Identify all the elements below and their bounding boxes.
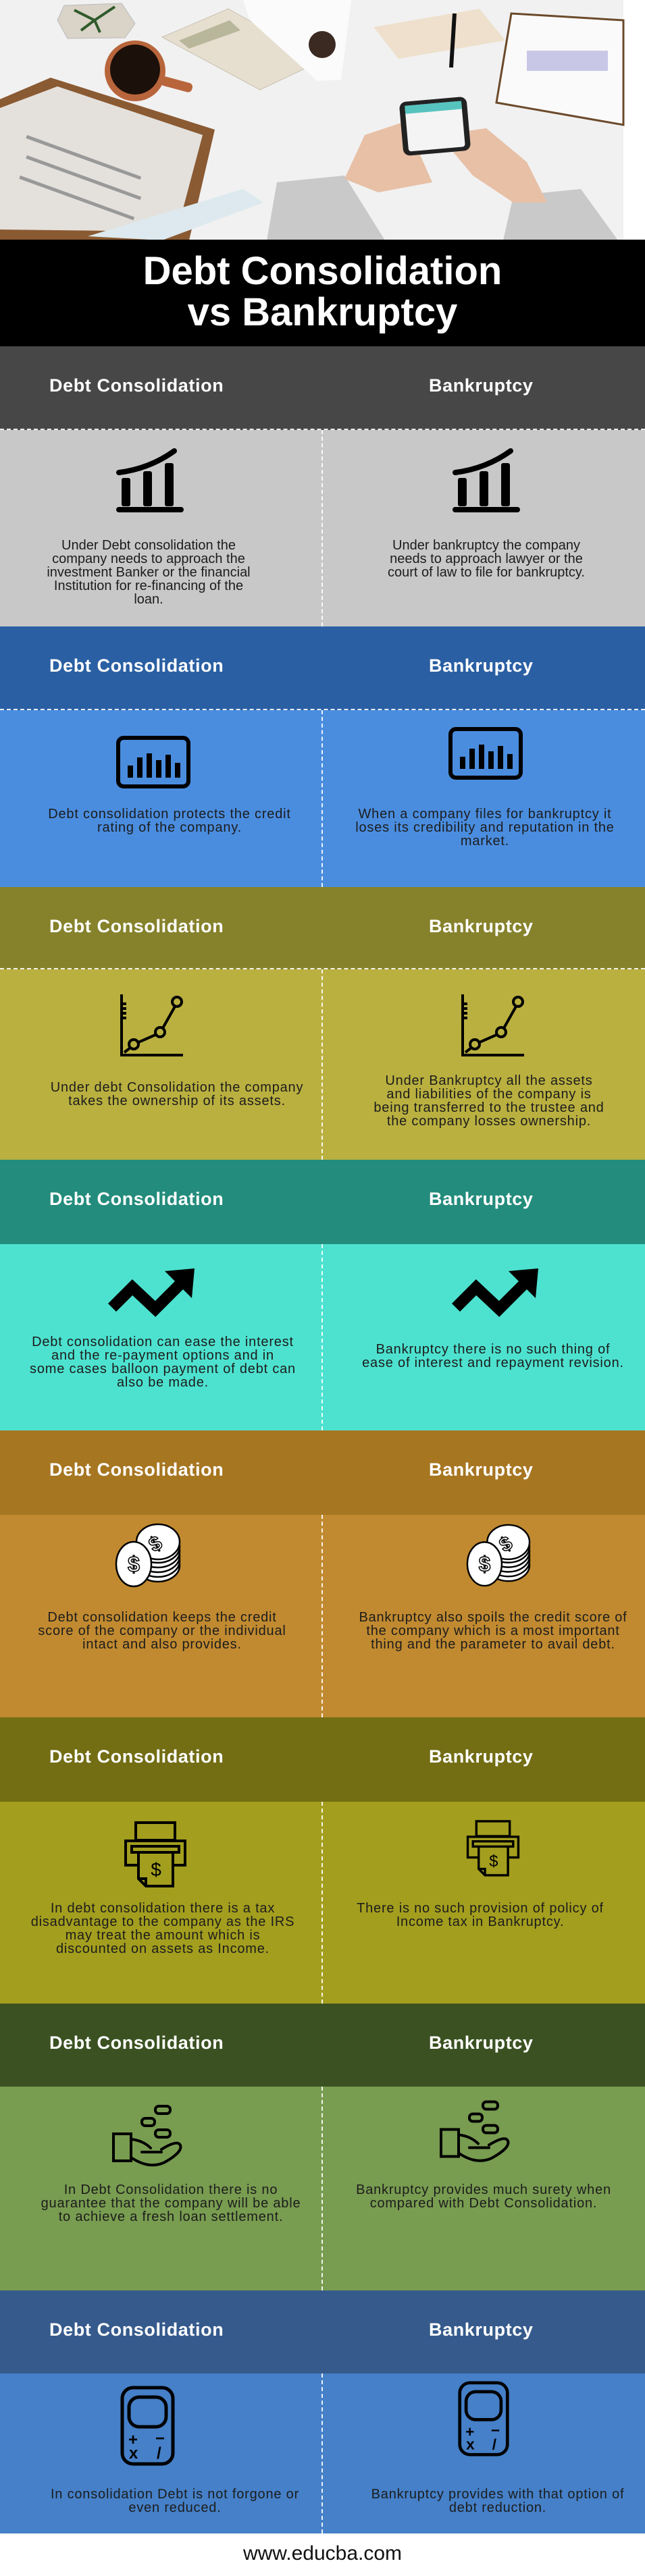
icon: coins right	[466, 1524, 531, 1586]
text: ease of interest	[30, 1335, 296, 1390]
icon: printer receipt left: $	[151, 1859, 161, 1880]
section 7 header	[0, 2004, 645, 2087]
text: keeps credit score: score of the company or the individual	[38, 1624, 286, 1638]
icon: monitor chart left	[116, 736, 190, 788]
icon: calculator left: +	[128, 2431, 138, 2449]
section 1 header	[0, 346, 645, 430]
section 3 header	[0, 887, 645, 969]
section 8: debt reduction	[0, 2290, 645, 2533]
section 8 header	[0, 2290, 645, 2373]
section 5 body	[0, 1515, 645, 1717]
icon: calculator left: −	[155, 2430, 165, 2448]
text: spoils credit score	[359, 1610, 627, 1652]
text: no guarantee: to achieve a fresh loan settlement.	[59, 2209, 283, 2224]
text: surety: Bankruptcy provides much surety when	[356, 2182, 611, 2197]
text: surety: compared with Debt Consolidation.	[370, 2196, 597, 2211]
section 2 header: Bankruptcy	[429, 655, 534, 676]
icon: coins left: $	[145, 1532, 166, 1557]
section 4 header: Bankruptcy	[429, 1189, 534, 1209]
text: debt consolidation approach: Under Debt consolidation the	[61, 538, 236, 553]
text: debt reduction option	[336, 2488, 645, 2515]
text: tax disadvantage: discounted on assets as Income.	[56, 1941, 269, 1956]
section 8 header: Debt Consolidation	[49, 2319, 224, 2340]
icon: calculator left: /	[157, 2444, 161, 2463]
icon: calculator right: −	[491, 2422, 500, 2439]
text: bankruptcy approach: court of law to file for bankruptcy.	[388, 565, 585, 580]
text: credit rating protected: rating of the company.	[97, 820, 242, 835]
icon: coins left	[115, 1523, 181, 1588]
icon: growth bar chart left	[116, 448, 184, 512]
text: takes ownership: takes the ownership of its assets.	[68, 1094, 286, 1108]
text: no guarantee: guarantee that the company will be able	[41, 2196, 301, 2211]
section 1 header: Bankruptcy	[429, 375, 534, 396]
text: takes ownership	[51, 1080, 303, 1108]
icon: hand with coins right	[440, 2101, 509, 2162]
header photo: desk with calculator, coffee, newspaper, phone	[0, 0, 624, 240]
text: ease of interest: some cases balloon payment of debt can	[30, 1362, 296, 1376]
icon: calculator right	[458, 2382, 509, 2456]
title: vs Bankruptcy	[188, 290, 457, 334]
section 3: ownership	[0, 887, 645, 1160]
text: no guarantee: In Debt Consolidation there is no	[64, 2182, 278, 2197]
text: credibility lost: market.	[461, 834, 509, 849]
icon: coins right: $	[479, 1553, 490, 1576]
text: bankruptcy approach	[388, 538, 585, 580]
icon: calculator right: /	[492, 2436, 497, 2453]
section 1 header: Debt Consolidation	[49, 375, 224, 396]
section 4: interest ease	[0, 1160, 645, 1430]
icon: calculator left: x	[129, 2444, 138, 2463]
icon: zigzag arrow left	[108, 1268, 195, 1317]
icon: line graph right	[461, 994, 524, 1056]
text: ease of interest: also be made.	[117, 1375, 209, 1390]
icon: hand with coins left	[112, 2105, 182, 2167]
icon: calculator left	[120, 2386, 174, 2465]
text: ease of interest: Debt consolidation can ease the interest	[32, 1335, 294, 1349]
text: debt reduction option: Bankruptcy provides with that option of	[371, 2487, 624, 2502]
text: loses ownership: being transferred to the trustee and	[373, 1100, 604, 1115]
text: ease of interest: and the re-payment options and in	[51, 1348, 274, 1363]
text: credibility lost	[355, 807, 615, 849]
text: no tax provision: There is no such provision of policy of	[357, 1901, 604, 1916]
footer: website: www.educba.com	[243, 2542, 402, 2565]
section 6 body	[0, 1802, 645, 2004]
text: keeps credit score	[38, 1610, 286, 1652]
section 5: credit score	[0, 1430, 645, 1717]
text: no ease: ease of interest and repayment revision.	[362, 1356, 624, 1370]
text: not reduced: In consolidation Debt is not forgone or	[51, 2487, 299, 2502]
text: debt consolidation approach	[47, 538, 251, 607]
text: bankruptcy approach: Under bankruptcy the company	[392, 538, 580, 553]
text: debt consolidation approach: loan.	[134, 592, 163, 607]
icon: printer receipt left	[124, 1821, 186, 1887]
section 7 header: Debt Consolidation	[49, 2033, 224, 2053]
text: loses ownership: and liabilities of the company is	[386, 1087, 592, 1102]
section 2 header: Debt Consolidation	[49, 655, 224, 676]
icon: monitor chart right	[448, 727, 523, 780]
text: debt consolidation approach: investment Banker or the financial	[47, 565, 251, 580]
icon: zigzag arrow right	[452, 1268, 538, 1317]
text: loses ownership: the company losses ownership.	[387, 1114, 591, 1129]
text: spoils credit score: the company which is a most important	[366, 1624, 620, 1638]
icon: printer receipt right	[466, 1820, 520, 1877]
section 5 header	[0, 1430, 645, 1515]
text: tax disadvantage: In debt consolidation there is a tax	[51, 1901, 275, 1916]
text: tax disadvantage: disadvantage to the company as the IRS	[31, 1914, 294, 1929]
icon: calculator right: x	[466, 2436, 475, 2453]
icon: line graph left	[120, 994, 183, 1056]
text: debt consolidation approach: Institution for re-financing of the	[54, 579, 243, 593]
text: takes ownership: Under debt Consolidation the company	[51, 1080, 303, 1095]
section 6 header: Debt Consolidation	[49, 1746, 224, 1767]
section 1 body	[0, 430, 645, 626]
text: not reduced	[51, 2487, 299, 2515]
text: not reduced: even reduced.	[128, 2500, 222, 2515]
text: no tax provision	[357, 1901, 604, 1929]
title: Debt Consolidation	[143, 249, 502, 293]
section 2: credit rating	[0, 626, 645, 887]
text: debt consolidation approach: company needs to approach the	[52, 552, 245, 566]
section 3 header: Bankruptcy	[429, 916, 534, 936]
icon: coins left: $	[128, 1552, 140, 1576]
section 8 header: Bankruptcy	[429, 2319, 534, 2340]
section 1: approach	[0, 346, 645, 626]
section 7: settlement	[0, 2004, 645, 2290]
section 5 header: Bankruptcy	[429, 1459, 534, 1480]
text: tax disadvantage: may treat the amount which is	[66, 1928, 260, 1943]
section 7 body	[0, 2087, 645, 2290]
section 4 body	[0, 1244, 645, 1430]
text: credit rating protected	[48, 807, 291, 835]
text: no guarantee	[41, 2182, 301, 2224]
icon: printer receipt right: $	[489, 1852, 498, 1871]
section 3 header: Debt Consolidation	[49, 916, 224, 936]
section 7 header: Bankruptcy	[429, 2033, 534, 2053]
text: no tax provision: Income tax in Bankruptcy.	[396, 1914, 564, 1929]
text: credit rating protected: Debt consolidation protects the credit	[48, 807, 291, 822]
section 4 header: Debt Consolidation	[49, 1189, 224, 1209]
section 4 header	[0, 1160, 645, 1244]
title	[0, 240, 645, 346]
text: tax disadvantage	[31, 1901, 294, 1956]
text: credibility lost: loses its credibility and reputation in the	[355, 820, 615, 835]
text: keeps credit score: Debt consolidation keeps the credit	[47, 1610, 277, 1625]
icon: calculator right: +	[465, 2423, 474, 2440]
text: no ease: Bankruptcy there is no such thing of	[376, 1342, 610, 1357]
section 6 header	[0, 1717, 645, 1802]
section 3 body	[0, 969, 645, 1160]
section 5 header: Debt Consolidation	[49, 1459, 224, 1480]
section 6: tax	[0, 1717, 645, 2004]
text: credibility lost: When a company files for bankruptcy it	[358, 807, 612, 822]
text: debt reduction option: debt reduction.	[449, 2500, 546, 2515]
text: surety	[356, 2182, 611, 2211]
icon: coins right: $	[496, 1532, 516, 1557]
section 6 header: Bankruptcy	[429, 1746, 534, 1767]
text: loses ownership	[373, 1073, 604, 1129]
text: spoils credit score: Bankruptcy also spoils the credit score of	[359, 1610, 627, 1625]
text: bankruptcy approach: needs to approach lawyer or the	[390, 552, 583, 566]
text: loses ownership: Under Bankruptcy all the assets	[385, 1073, 593, 1088]
section 8 body	[0, 2373, 645, 2533]
text: spoils credit score: thing and the parameter to avail debt.	[371, 1637, 615, 1652]
section 2 header	[0, 626, 645, 710]
text: no ease	[362, 1342, 624, 1370]
text: keeps credit score: intact and also provides.	[82, 1637, 242, 1652]
icon: growth bar chart right	[453, 448, 520, 512]
section 2 body	[0, 710, 645, 887]
